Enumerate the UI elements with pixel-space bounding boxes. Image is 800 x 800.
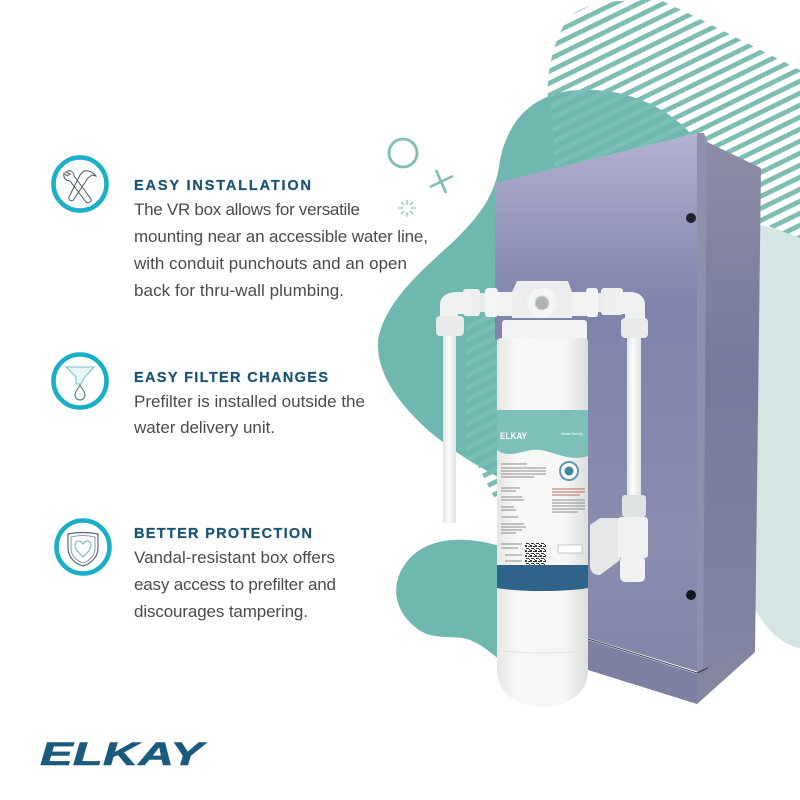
label seal centre	[564, 466, 574, 476]
box front	[495, 133, 699, 672]
QR code	[525, 543, 546, 565]
bracket	[590, 518, 620, 575]
filter bottom seam	[497, 650, 588, 653]
description	[133, 392, 365, 437]
door edge	[697, 133, 707, 674]
description: back for thru-wall plumbing.	[134, 281, 344, 300]
label product name: WaterSentry	[561, 431, 583, 436]
heading: BETTER PROTECTION	[134, 526, 312, 542]
left ring	[485, 288, 498, 317]
right collar	[601, 288, 623, 315]
top screw	[686, 213, 696, 223]
striped blob	[548, 0, 800, 238]
flange side	[697, 645, 755, 704]
label warning lines	[552, 489, 585, 495]
valve coupling top	[622, 495, 646, 517]
icon: funnel	[54, 354, 106, 408]
description: with conduit punchouts and an open	[133, 254, 407, 273]
feature: easy filter changes	[54, 354, 365, 437]
right ring	[586, 288, 598, 317]
description: discourages tampering.	[134, 602, 308, 621]
valve body	[618, 517, 648, 558]
description: mounting near an accessible water line,	[134, 227, 428, 246]
Elkay logo: ELKAY	[40, 736, 207, 772]
bottom flange	[588, 640, 697, 704]
port hole	[535, 296, 549, 310]
label blue band	[497, 565, 588, 591]
main teal blob	[378, 90, 692, 478]
filter cap	[502, 320, 587, 342]
heading: EASY FILTER CHANGES	[134, 370, 328, 386]
description: The VR box allows for versatile	[134, 200, 360, 219]
description: Prefilter is installed outside the	[134, 392, 365, 411]
right pipe	[627, 335, 641, 495]
port	[527, 288, 557, 318]
description	[133, 200, 428, 300]
diagram	[558, 545, 582, 553]
left pipe	[443, 330, 456, 523]
description: Vandal-resistant box offers	[134, 548, 335, 567]
icon: shield with heart	[56, 520, 110, 574]
valve assembly	[590, 495, 648, 582]
right coupling	[621, 318, 648, 338]
description: water delivery unit.	[133, 418, 275, 437]
feature: better protection	[56, 520, 336, 621]
decorative cross	[430, 170, 453, 193]
filter pipes and head	[436, 281, 648, 523]
head body	[498, 292, 586, 316]
label notes lines	[552, 500, 585, 512]
label brand: ELKAY	[500, 431, 527, 441]
description: easy access to prefilter and	[134, 575, 336, 594]
pale teal blob right	[740, 224, 800, 648]
heading: EASY INSTALLATION	[134, 178, 311, 194]
lower screw	[686, 590, 696, 600]
decorative sparkle	[398, 200, 416, 217]
striped blob lower fragment on white	[478, 466, 498, 505]
head top	[512, 281, 572, 318]
flange seam	[588, 639, 708, 673]
horizontal tube	[465, 293, 610, 312]
label teal header	[497, 410, 588, 458]
right elbow	[620, 292, 645, 320]
lower teal blob	[396, 540, 500, 660]
steel box	[495, 133, 761, 704]
description	[134, 548, 336, 621]
filter cartridge	[497, 320, 588, 707]
label body text lines	[501, 464, 546, 561]
filter body	[497, 338, 588, 707]
valve coupling bottom	[620, 556, 645, 582]
left coupling	[436, 316, 464, 336]
label seal	[560, 462, 578, 480]
stripes inside teal blob	[466, 85, 700, 480]
left collar	[463, 289, 480, 316]
left elbow	[440, 292, 465, 318]
feature: easy installation	[54, 158, 428, 300]
box side	[697, 141, 761, 704]
decorative circle	[389, 139, 417, 167]
icon: tools	[54, 158, 106, 210]
